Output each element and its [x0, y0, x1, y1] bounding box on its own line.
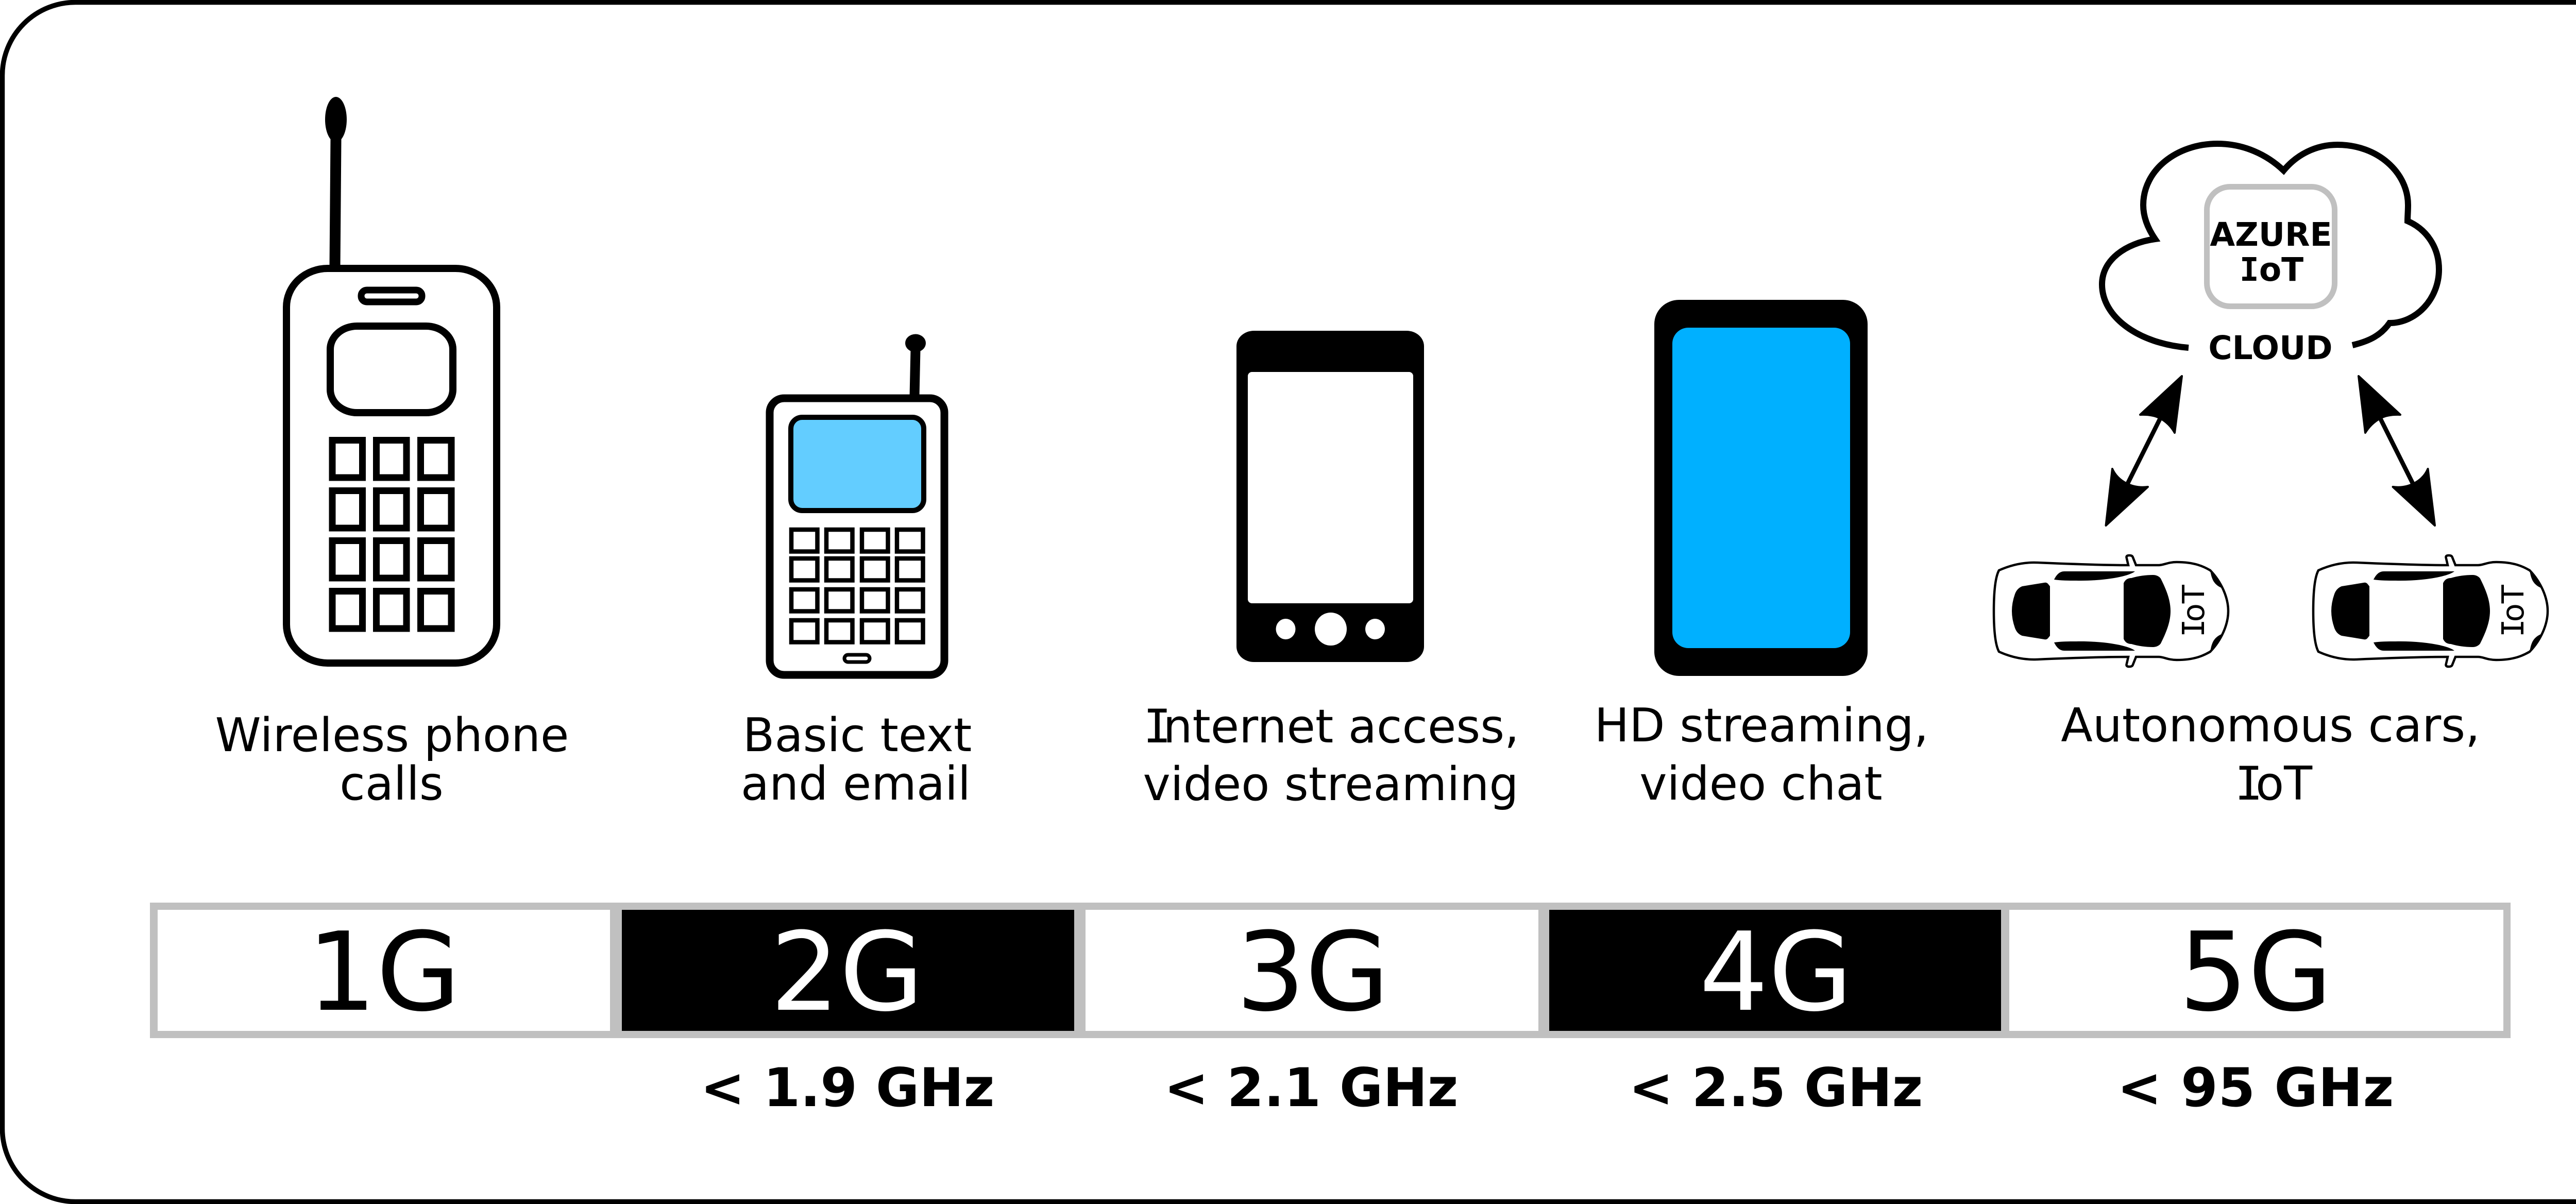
- phone keypad: [332, 440, 451, 629]
- phone antenna: [325, 97, 347, 267]
- car IoT mark: IoT: [2176, 584, 2211, 637]
- frequency: 2G: < 1.9 GHz: [701, 1057, 994, 1119]
- label: 4G use: HD streaming,: [1595, 699, 1928, 753]
- icon: 2G basic phone: [770, 334, 944, 675]
- band cell: 5G: [2009, 909, 2503, 1036]
- car glass and lights: [2331, 570, 2542, 652]
- car IoT mark: IoT: [2495, 584, 2531, 637]
- label: 3G use: Internet access,: [1143, 700, 1519, 754]
- label: 1G use: calls: [340, 757, 444, 811]
- phone speaker: [844, 655, 870, 662]
- Azure IoT box: [2207, 186, 2335, 306]
- phone colour screen: [791, 417, 924, 511]
- phone body: [1236, 331, 1424, 662]
- label: 2G use: Basic text: [743, 708, 972, 762]
- band frame: [150, 903, 2511, 1038]
- phone buttons: [1276, 613, 1385, 646]
- icon: cloud with Azure IoT: [2102, 144, 2439, 367]
- band cell: 1G: 1G: [307, 909, 461, 1036]
- phone screen: [1248, 372, 1413, 603]
- label: 1G use: Wireless phone: [215, 708, 569, 762]
- Azure IoT box: AZURE: [2210, 216, 2332, 253]
- Azure IoT box: IoT: [2240, 251, 2303, 289]
- label: 2G use: and email: [741, 757, 971, 811]
- phone screen: [330, 326, 453, 413]
- band cell: 3G: [1086, 909, 1538, 1036]
- band cell: 1G: [158, 909, 610, 1036]
- phone screen: [1672, 328, 1850, 648]
- icon: 4G smartphone: [1654, 300, 1868, 676]
- car body: [1994, 555, 2228, 667]
- label: 3G use: video streaming: [1143, 757, 1519, 811]
- band cell: 2G: 2G: [770, 909, 924, 1036]
- phone speaker: [361, 290, 422, 302]
- frequency: 5G: < 95 GHz: [2117, 1057, 2394, 1119]
- phone body: [770, 398, 944, 675]
- icon: 3G smartphone: [1236, 331, 1424, 662]
- phone body: [1654, 300, 1868, 676]
- band cell: 4G: [1549, 909, 2001, 1036]
- cloud outline: [2102, 144, 2439, 348]
- phone antenna: [905, 334, 926, 397]
- band cell: 5G: 5G: [2179, 909, 2332, 1036]
- band cell: 2G: [622, 909, 1074, 1036]
- label: 5G use: Autonomous cars,: [2061, 699, 2480, 753]
- phone keypad: [791, 530, 923, 642]
- icon: 1G wireless phone: [286, 97, 497, 663]
- arrow: right car to cloud: [2359, 376, 2435, 525]
- icon: IoT car 1: [1994, 555, 2228, 667]
- frequency: 4G: < 2.5 GHz: [1629, 1057, 1923, 1119]
- generation band: [150, 903, 2511, 1038]
- label: 4G use: video chat: [1639, 757, 1883, 811]
- car glass and lights: [2012, 570, 2223, 652]
- frequency: 3G: < 2.1 GHz: [1164, 1057, 1458, 1119]
- cloud label: CLOUD: [2208, 329, 2333, 367]
- label: 5G use: IoT: [2235, 757, 2312, 811]
- band cell: 3G: 3G: [1236, 909, 1389, 1036]
- car body: [2313, 555, 2548, 667]
- icon: IoT car 2: [2313, 555, 2548, 667]
- arrow: left car to cloud: [2106, 376, 2182, 525]
- band cell: 4G: 4G: [1699, 909, 1853, 1036]
- phone body: [286, 268, 497, 663]
